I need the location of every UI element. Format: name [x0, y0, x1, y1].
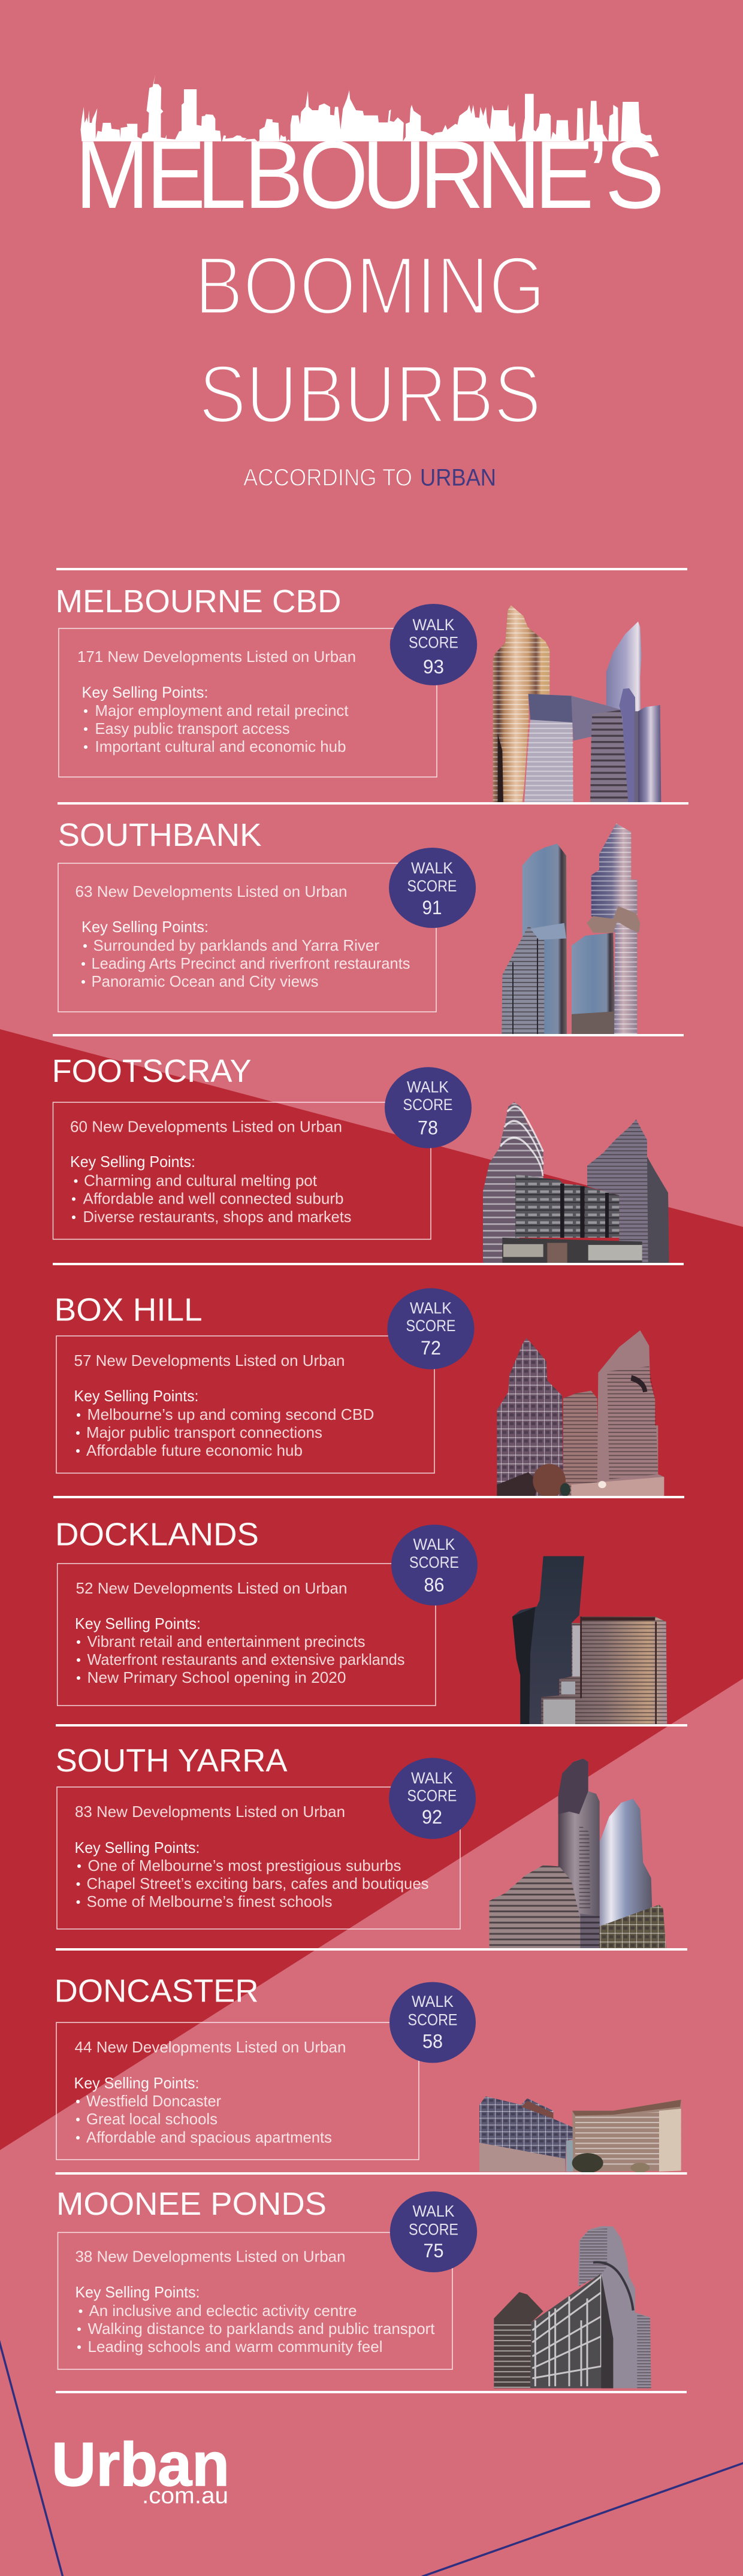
selling points list: Some of Melbourne’s finest schools [86, 1892, 332, 1910]
panel outline [58, 1564, 436, 1706]
logo: Urban.com.au [52, 2430, 229, 2509]
selling points list: Surrounded by parklands and Yarra River [93, 936, 379, 954]
walk score badge [389, 1982, 476, 2063]
selling points list: New Primary School opening in 2020 [87, 1668, 346, 1686]
selling points list: Major employment and retail precinct [95, 702, 349, 719]
walk score badge: WALK [407, 1078, 449, 1096]
heading: MOONEE PONDS [56, 2186, 327, 2222]
selling points list: Vibrant retail and entertainment precincts [87, 1632, 366, 1650]
developments count: 83 New Developments Listed on Urban [75, 1803, 345, 1821]
walk score badge: WALK [413, 1535, 455, 1553]
developments count: 52 New Developments Listed on Urban [75, 1579, 348, 1597]
building illustration [490, 1759, 666, 1949]
selling points list: Charming and cultural melting pot [84, 1172, 318, 1190]
selling points list: Affordable and spacious apartments [86, 2128, 332, 2146]
selling points list [76, 2092, 332, 2146]
background: navy diagonal line left [0, 2339, 63, 2576]
walk score badge [389, 1758, 476, 1839]
key selling points heading: Key Selling Points: [81, 683, 209, 701]
heading: MELBOURNE CBD [55, 583, 342, 619]
title: Melbourne's with skyline [75, 75, 665, 228]
section: Melbourne CBD [55, 583, 661, 802]
info panel [59, 628, 437, 777]
key selling points heading: Key Selling Points: [74, 2074, 199, 2092]
section: South Yarra [56, 1743, 666, 1949]
selling points list [77, 1632, 405, 1686]
developments count: 44 New Developments Listed on Urban [74, 2038, 346, 2056]
walk score badge: SCORE [407, 1787, 457, 1805]
panel outline [56, 1336, 434, 1473]
selling points list [84, 702, 349, 755]
panel outline [58, 863, 436, 1012]
selling points list: Walking distance to parklands and public transport [87, 2320, 435, 2338]
walk score badge: SCORE [406, 1317, 455, 1335]
info panel [56, 2022, 419, 2160]
developments count: 171 New Developments Listed on Urban [77, 648, 356, 666]
selling points list: Waterfront restaurants and extensive parklands [87, 1650, 405, 1668]
key selling points heading: Key Selling Points: [75, 1614, 201, 1632]
walk score badge: SCORE [409, 2221, 458, 2239]
info panel [58, 1564, 436, 1706]
walk score badge: 93 [423, 656, 444, 678]
subtitle: Urban: URBAN [420, 465, 496, 491]
walk score badge: SCORE [409, 634, 458, 652]
subtitle: according to: ACCORDING TO [243, 465, 412, 491]
panel outline [57, 1787, 460, 1929]
info panel [58, 2232, 452, 2369]
selling points list: Easy public transport access [95, 719, 290, 737]
walk score badge: WALK [412, 2202, 454, 2220]
selling points list: Diverse restaurants, shops and markets [83, 1208, 351, 1226]
section: Box Hill [55, 1288, 664, 1498]
walk score badge [391, 1525, 478, 1606]
panel outline [56, 2022, 419, 2160]
panel outline [53, 1102, 431, 1239]
walk score badge [385, 1067, 472, 1148]
building illustration [494, 2226, 651, 2388]
developments count: 63 New Developments Listed on Urban [75, 882, 348, 900]
heading: Booming: BOOMING [195, 240, 545, 332]
logo wordmark: Urban [52, 2430, 229, 2499]
walk score badge [390, 604, 477, 685]
selling points list [76, 1405, 374, 1459]
panel outline [59, 628, 437, 777]
section: Doncaster [55, 1973, 681, 2173]
walk score badge: 72 [421, 1337, 441, 1359]
logo domain: .com.au [142, 2484, 228, 2509]
info panel [53, 1102, 431, 1239]
section: Docklands [55, 1517, 667, 1725]
selling points list [81, 936, 410, 990]
selling points list: Important cultural and economic hub [95, 737, 346, 755]
key selling points heading: Key Selling Points: [70, 1153, 195, 1171]
selling points list: Great local schools [86, 2110, 218, 2128]
heading: DONCASTER [55, 1973, 259, 2009]
key selling points heading: Key Selling Points: [81, 918, 209, 936]
info panel [58, 863, 436, 1012]
info panel [56, 1336, 434, 1473]
developments count: 38 New Developments Listed on Urban [75, 2248, 345, 2266]
building illustration [512, 1556, 667, 1725]
walk score badge: 86 [424, 1574, 445, 1596]
building illustration [497, 1331, 664, 1498]
developments count: 60 New Developments Listed on Urban [70, 1118, 342, 1136]
selling points list: One of Melbourne’s most prestigious suburbs [87, 1857, 401, 1874]
selling points list: Panoramic Ocean and City views [91, 972, 319, 990]
walk score badge: 91 [422, 897, 442, 918]
key selling points heading: Key Selling Points: [75, 2283, 200, 2301]
heading: Suburbs: SUBURBS [199, 349, 541, 440]
selling points list: Affordable future economic hub [86, 1441, 303, 1459]
walk score badge: WALK [411, 859, 453, 877]
walk score badge [390, 2191, 477, 2272]
walk score badge: SCORE [407, 2011, 458, 2029]
panel outline [58, 2232, 452, 2369]
key selling points heading: Key Selling Points: [74, 1839, 200, 1857]
heading: BOX HILL [55, 1292, 203, 1328]
heading word Melbourne's: MELBOURNE’S [75, 120, 665, 228]
selling points list: Melbourne’s up and coming second CBD [87, 1405, 374, 1423]
section: Moonee Ponds [56, 2186, 651, 2388]
building illustration [483, 1102, 669, 1263]
selling points list: Affordable and well connected suburb [83, 1190, 344, 1208]
walk score badge: 78 [418, 1117, 438, 1138]
selling points list [77, 2302, 435, 2356]
walk score badge: WALK [412, 1993, 454, 2010]
selling points list: Major public transport connections [86, 1423, 322, 1441]
walk score badge: SCORE [407, 877, 457, 895]
heading: SOUTH YARRA [56, 1743, 288, 1779]
heading: FOOTSCRAY [52, 1053, 252, 1089]
walk score badge [387, 1288, 475, 1369]
background: navy diagonal line right [422, 2463, 743, 2576]
building illustration [479, 2096, 681, 2173]
walk score badge: SCORE [409, 1553, 459, 1571]
selling points list: Leading schools and warm community feel [87, 2338, 382, 2356]
selling points list: Leading Arts Precinct and riverfront restaurants [91, 954, 410, 972]
selling points list: An inclusive and eclectic activity centre [89, 2302, 357, 2320]
walk score badge: 75 [423, 2240, 443, 2261]
heading: SOUTHBANK [58, 817, 262, 853]
building illustration [493, 605, 661, 802]
walk score badge [389, 848, 476, 928]
walk score badge: WALK [411, 1769, 453, 1787]
developments count: 57 New Developments Listed on Urban [74, 1352, 345, 1369]
section: Southbank [58, 817, 640, 1035]
building illustration [502, 824, 640, 1035]
section: Footscray [52, 1053, 669, 1263]
info panel [57, 1787, 460, 1929]
selling points list: Chapel Street’s exciting bars, cafes and boutiques [86, 1874, 429, 1892]
walk score badge: SCORE [403, 1096, 453, 1114]
heading: DOCKLANDS [55, 1517, 259, 1553]
walk score badge: 92 [422, 1806, 442, 1828]
walk score badge: WALK [410, 1299, 452, 1317]
selling points list [77, 1857, 429, 1910]
selling points list [72, 1172, 351, 1226]
skyline silhouette [80, 75, 652, 141]
walk score badge: 58 [422, 2031, 443, 2052]
key selling points heading: Key Selling Points: [74, 1387, 199, 1405]
walk score badge: WALK [412, 616, 454, 634]
background: red diagonal band [0, 1029, 743, 2150]
selling points list: Westfield Doncaster [86, 2092, 221, 2110]
